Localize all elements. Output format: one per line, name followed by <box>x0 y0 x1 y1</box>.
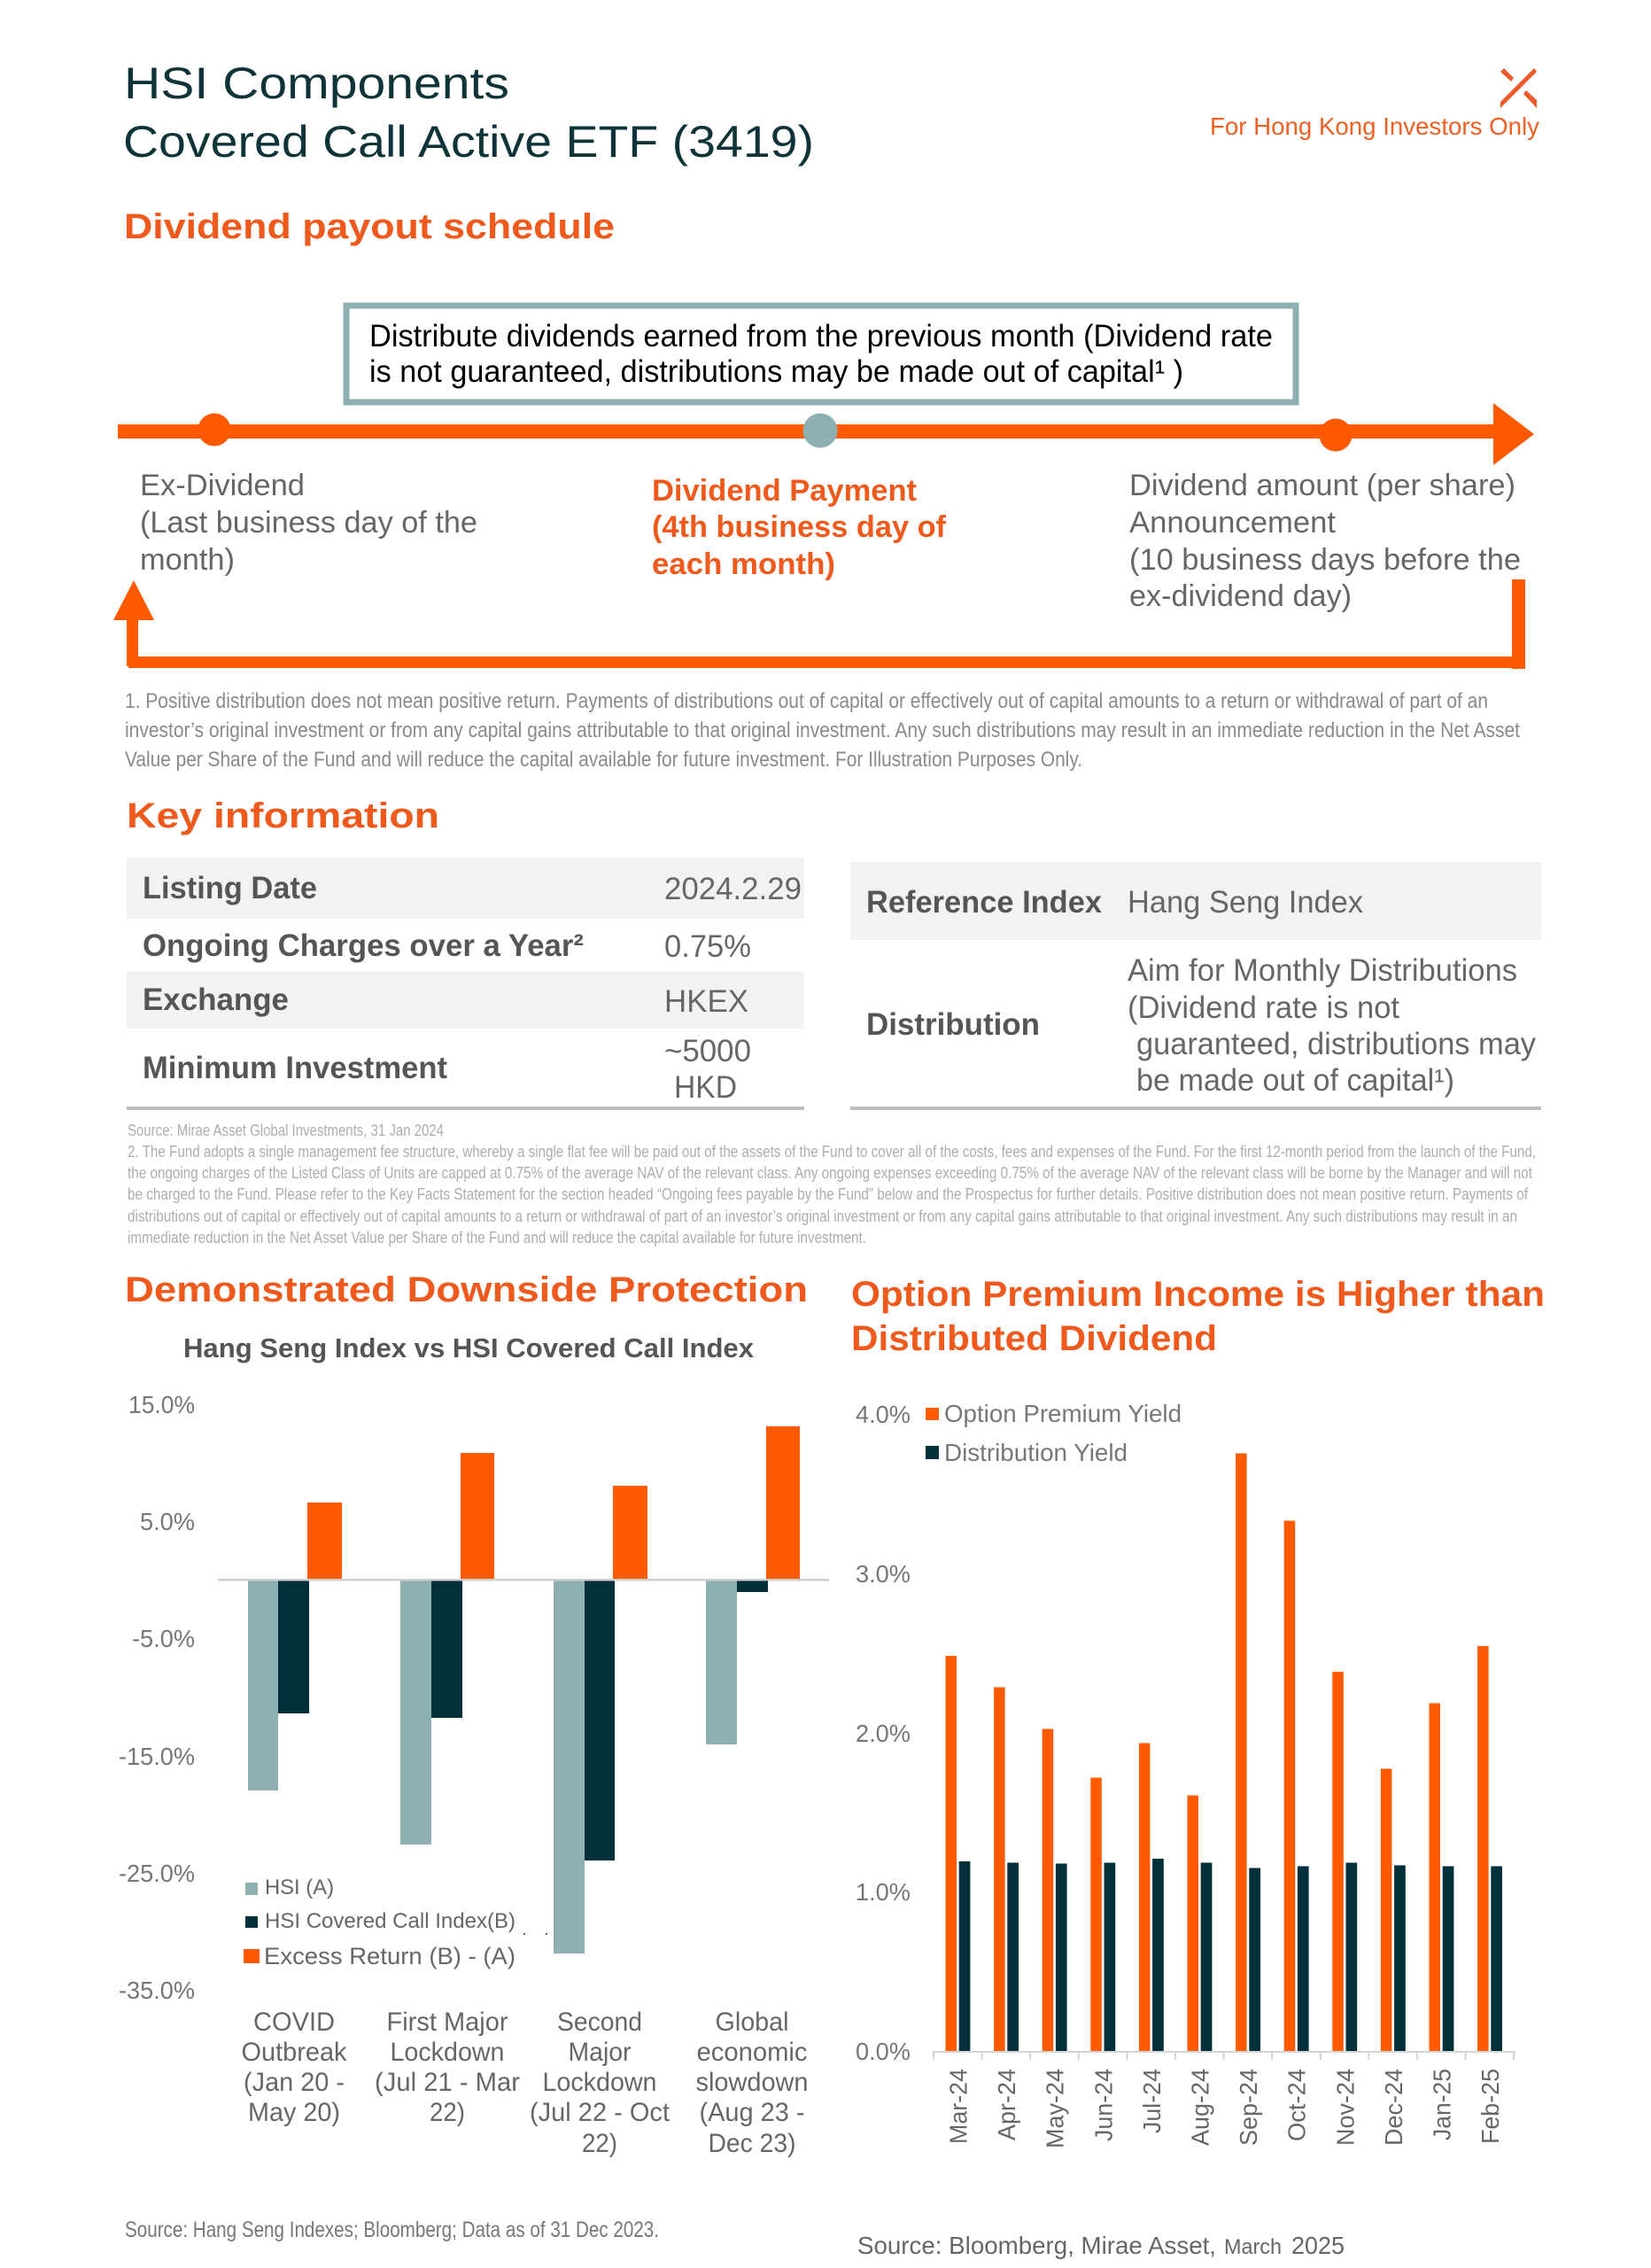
label: announcement: (10 business days before the <box>1129 543 1521 577</box>
panel: key information left table: Ongoing Charges over a Year² <box>143 928 584 963</box>
panel: key information right table: Distribution <box>866 1007 1040 1042</box>
y axis labels: 3.0% <box>856 1560 911 1588</box>
panel: payout timeline <box>113 306 1534 669</box>
category labels <box>241 2008 808 2158</box>
label: dividend payment: Dividend Payment <box>652 474 917 508</box>
panel: option premium income <box>851 1275 1545 2259</box>
month labels: Aug-24 <box>1187 2069 1213 2146</box>
panel: key information right table: Hang Seng Index <box>1128 885 1363 920</box>
investor notice: For Hong Kong Investors Only <box>1210 113 1539 140</box>
legend: HSI (A) <box>265 1876 334 1899</box>
panel: key information left table: 2024.2.29 <box>664 872 802 906</box>
label: ex-dividend: month) <box>140 543 235 577</box>
legend <box>244 1876 547 1969</box>
legend: HSI Covered Call Index(B) <box>265 1909 515 1933</box>
heading: option premium income: Distributed Dividend <box>851 1319 1217 1358</box>
y axis labels: 0.0% <box>856 2038 911 2065</box>
panel: key information left table: HKEX <box>664 984 748 1019</box>
category labels: Major <box>569 2038 632 2067</box>
label: ex-dividend: (Last business day of the <box>140 506 477 540</box>
heading: option premium income: Option Premium Income is Higher than <box>851 1275 1545 1314</box>
callout box: Distribute dividends earned from the previous month (Dividend rate <box>369 319 1273 353</box>
category labels: May 20) <box>248 2098 340 2127</box>
marker: announcement <box>1320 418 1352 452</box>
panel: key information right table: guaranteed, distributions may <box>1136 1027 1536 1061</box>
icon: logo <box>1500 68 1537 108</box>
y axis labels <box>856 1401 911 2065</box>
label: announcement <box>1129 469 1521 613</box>
label: announcement: Announcement <box>1129 506 1337 540</box>
panel: key information left table: Exchange <box>143 983 289 1017</box>
callout box <box>346 306 1296 402</box>
panel: key information left table: ~5000 <box>664 1034 751 1068</box>
label: dividend payment <box>652 474 947 581</box>
category labels: Second <box>557 2008 642 2037</box>
month labels: Feb-25 <box>1477 2069 1504 2144</box>
y axis labels: 5.0% <box>140 1508 195 1535</box>
legend <box>926 1400 1182 1466</box>
arrow: timeline <box>118 403 1534 465</box>
category labels: (Jul 21 - Mar <box>375 2068 520 2097</box>
panel: key information right table <box>850 862 1541 1110</box>
y axis labels: -15.0% <box>119 1743 195 1770</box>
label: dividend payment: (4th business day of <box>652 510 947 544</box>
category labels: Outbreak <box>241 2038 347 2067</box>
panel: key information right table: (Dividend rate is not <box>1128 990 1399 1025</box>
month labels: Dec-24 <box>1380 2069 1407 2146</box>
label: announcement: ex-dividend day) <box>1129 579 1352 613</box>
month labels: Jan-25 <box>1428 2069 1456 2140</box>
source and footnote 2: Source: Mirae Asset Global Investments, 31 Jan 2024 <box>128 1122 444 1139</box>
y axis labels: 4.0% <box>856 1401 911 1428</box>
legend: Distribution Yield <box>944 1439 1128 1466</box>
source and footnote 2: immediate reduction in the Net Asset Value per Share of the Fund and will reduce the capital available for future investment. <box>128 1229 866 1247</box>
panel: key information left table: HKD <box>674 1070 737 1105</box>
bar chart: option premium yield <box>946 1453 1489 2052</box>
x axis <box>933 2052 1515 2060</box>
category labels: Lockdown <box>542 2068 657 2097</box>
heading: demonstrated downside protection: Demonstrated Downside Protection <box>125 1270 808 1309</box>
source: Source: Hang Seng Indexes; Bloomberg; Data as of 31 Dec 2023. <box>125 2218 659 2242</box>
bar chart: distribution yield <box>959 1859 1502 2052</box>
category labels: economic <box>696 2038 808 2067</box>
chart title: Hang Seng Index vs HSI Covered Call Index <box>183 1332 755 1363</box>
title: HSI Components <box>124 58 509 108</box>
panel: key information right table: be made out of capital¹) <box>1136 1063 1454 1098</box>
panel: downside protection <box>119 1270 829 2242</box>
y axis labels: 2.0% <box>856 1720 911 1747</box>
category labels: Dec 23) <box>709 2129 795 2158</box>
heading: key information: Key information <box>127 796 439 835</box>
callout box: is not guaranteed, distributions may be made out of capital¹ ) <box>369 354 1183 389</box>
label: dividend payment: each month) <box>652 548 835 581</box>
month labels <box>944 2069 1504 2148</box>
footnote 1: 1. Positive distribution does not mean positive return. Payments of distributions out of capital or effectively out of capital amounts to a return or withdrawal of part of an <box>125 689 1488 713</box>
arrow: return loop <box>113 579 1525 669</box>
marker: ex-dividend <box>198 413 230 447</box>
category labels: (Jan 20 - <box>244 2068 345 2097</box>
month labels: Jun-24 <box>1089 2069 1117 2141</box>
source: Source: Bloomberg, Mirae Asset, <box>857 2232 1216 2259</box>
panel: key information right table: Aim for Monthly Distributions <box>1128 953 1517 988</box>
month labels: Sep-24 <box>1235 2069 1262 2146</box>
category labels: 22) <box>430 2098 465 2127</box>
marker: dividend payment <box>802 413 838 448</box>
panel: key information left table <box>127 858 804 1110</box>
month labels: Apr-24 <box>993 2069 1020 2140</box>
y axis labels: -5.0% <box>132 1625 195 1652</box>
y axis labels: -35.0% <box>119 1977 195 2004</box>
label: announcement: Dividend amount (per share) <box>1129 469 1515 502</box>
category labels: Lockdown <box>390 2038 505 2067</box>
y axis labels: -25.0% <box>119 1860 195 1887</box>
heading: dividend payout schedule: Dividend payout schedule <box>124 207 615 246</box>
label: ex-dividend: Ex-Dividend <box>140 469 305 502</box>
legend: Option Premium Yield <box>944 1400 1182 1427</box>
footnote 1: Value per Share of the Fund and will reduce the capital available for future investment. For Illustration Purposes Only. <box>125 748 1082 772</box>
label: ex-dividend <box>140 469 477 577</box>
category labels: (Jul 22 - Oct <box>530 2098 670 2127</box>
panel: key information left table: 0.75% <box>664 929 751 964</box>
month labels: Oct-24 <box>1283 2069 1311 2141</box>
category labels: Global <box>716 2008 788 2037</box>
title <box>123 58 814 167</box>
y axis labels <box>119 1391 195 2004</box>
source: 2025 <box>1291 2232 1345 2259</box>
month labels: May-24 <box>1042 2069 1069 2148</box>
panel: key information right table: Reference Index <box>866 885 1103 920</box>
panel: key information left table: Listing Date <box>143 871 317 905</box>
footnote 1 <box>125 689 1520 772</box>
bar chart: index comparison <box>218 1426 829 1953</box>
title: Covered Call Active ETF (3419) <box>123 117 814 167</box>
month labels: Mar-24 <box>944 2069 973 2144</box>
y axis labels: 15.0% <box>128 1391 195 1418</box>
month labels: Jul-24 <box>1138 2069 1166 2133</box>
source and footnote 2 <box>128 1122 1536 1247</box>
month labels: Nov-24 <box>1331 2069 1359 2146</box>
source: March <box>1224 2235 1282 2259</box>
category labels: slowdown <box>696 2068 808 2097</box>
legend: Excess Return (B) - (A) <box>264 1943 515 1969</box>
y axis labels: 1.0% <box>856 1878 911 1906</box>
heading: option premium income <box>851 1275 1545 1358</box>
panel: key information left table: Minimum Investment <box>143 1051 447 1085</box>
category labels: 22) <box>582 2129 617 2158</box>
category labels: (Aug 23 - <box>700 2098 804 2127</box>
category labels: First Major <box>386 2008 508 2037</box>
category labels: COVID <box>253 2008 335 2037</box>
